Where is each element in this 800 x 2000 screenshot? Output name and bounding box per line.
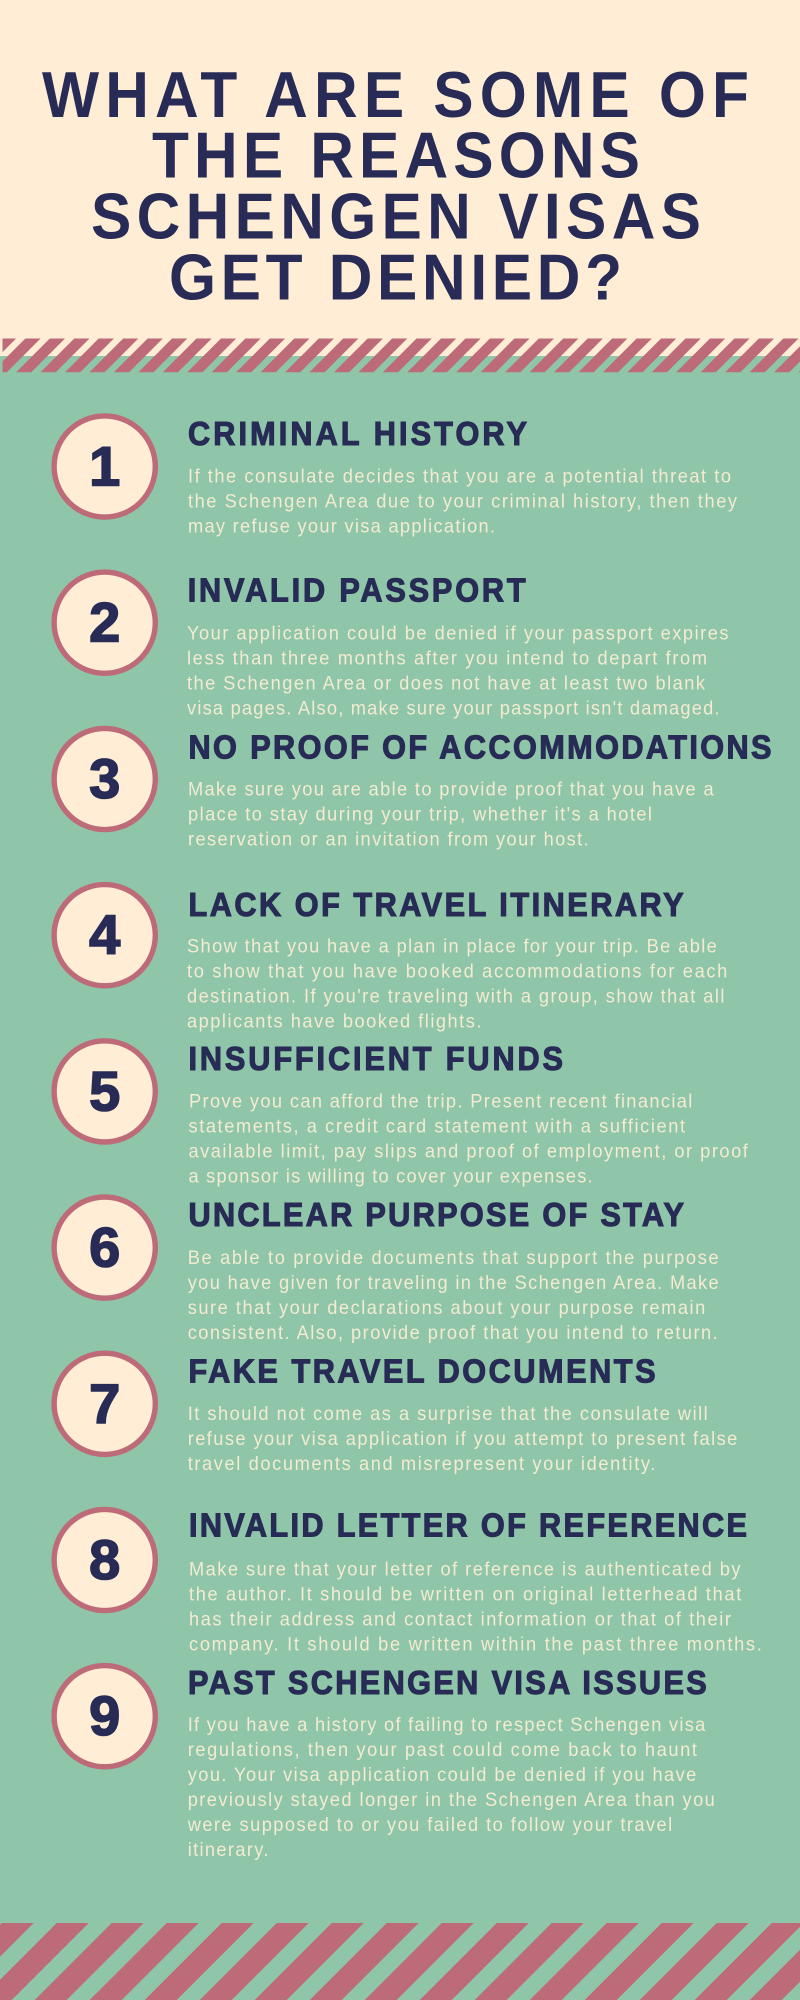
text 6: sure that your declarations about your purpose remain bbox=[188, 1297, 705, 1318]
number badge 7: 7 bbox=[89, 1372, 120, 1435]
heading 8: INVALID LETTER OF REFERENCE bbox=[189, 1507, 747, 1544]
text 8: company. It should be written within the past three months. bbox=[189, 1633, 762, 1654]
text 9: regulations, then your past could come back to haunt bbox=[188, 1739, 698, 1760]
heading 6: UNCLEAR PURPOSE OF STAY bbox=[188, 1196, 684, 1233]
text 2: Your application could be denied if your passport expires bbox=[187, 622, 729, 643]
number badge 9: 9 bbox=[89, 1684, 120, 1747]
text 8: has their address and contact information or that of their bbox=[189, 1608, 731, 1629]
number badge 2: 2 bbox=[89, 591, 120, 654]
number badge 2 bbox=[54, 572, 155, 673]
heading 1: CRIMINAL HISTORY bbox=[188, 415, 527, 452]
heading 9: PAST SCHENGEN VISA ISSUES bbox=[188, 1664, 707, 1701]
text 3: Make sure you are able to provide proof that you have a bbox=[188, 778, 714, 800]
number badge 8 bbox=[54, 1509, 155, 1611]
item 9: past schengen visa issues bbox=[54, 1664, 715, 1860]
heading 2: INVALID PASSPORT bbox=[188, 572, 526, 609]
number badge 3 bbox=[54, 728, 155, 830]
text 7: travel documents and misrepresent your identity. bbox=[188, 1453, 655, 1474]
text 4: to show that you have booked accommodations for each bbox=[187, 960, 727, 981]
item 7: fake travel documents bbox=[54, 1353, 737, 1474]
item 2: invalid passport bbox=[54, 572, 729, 718]
heading 3: NO PROOF OF ACCOMMODATIONS bbox=[188, 728, 772, 766]
heading 7: FAKE TRAVEL DOCUMENTS bbox=[188, 1353, 656, 1390]
number badge 4: 4 bbox=[89, 903, 120, 966]
text 2 bbox=[187, 622, 729, 718]
text 4: applicants have booked flights. bbox=[187, 1010, 481, 1031]
text 1 bbox=[188, 465, 738, 536]
title bbox=[42, 59, 749, 314]
text 8 bbox=[189, 1558, 762, 1654]
text 7 bbox=[188, 1403, 737, 1474]
text 6 bbox=[188, 1247, 719, 1343]
text 1: the Schengen Area due to your criminal history, then they bbox=[188, 490, 738, 511]
heading 4: LACK OF TRAVEL ITINERARY bbox=[188, 886, 684, 923]
text 1: may refuse your visa application. bbox=[188, 515, 495, 536]
number badge 1 bbox=[54, 416, 155, 517]
text 1: If the consulate decides that you are a potential threat to bbox=[188, 465, 731, 486]
number badge 5 bbox=[54, 1041, 155, 1142]
number badge 3: 3 bbox=[89, 747, 120, 810]
text 6: consistent. Also, provide proof that you intend to return. bbox=[188, 1322, 718, 1343]
text 3 bbox=[188, 778, 714, 850]
header panel: cream bbox=[0, 0, 800, 356]
title: THE REASONS bbox=[152, 120, 640, 192]
text 9: If you have a history of failing to respect Schengen visa bbox=[188, 1714, 706, 1735]
text 3: place to stay during your trip, whether it's a hotel bbox=[188, 803, 652, 825]
text 9: you. Your visa application could be denied if you have bbox=[188, 1764, 696, 1785]
number badge 6: 6 bbox=[89, 1216, 120, 1279]
text 7: It should not come as a surprise that the consulate will bbox=[188, 1403, 708, 1424]
number badge 5: 5 bbox=[89, 1059, 120, 1122]
item 5: insufficient funds bbox=[54, 1040, 749, 1186]
text 4: destination. If you're traveling with a group, show that all bbox=[187, 985, 724, 1006]
item 4: lack of travel itinerary bbox=[54, 885, 727, 1031]
text 9 bbox=[187, 1714, 715, 1860]
text 3: reservation or an invitation from your host. bbox=[188, 828, 589, 850]
text 5: statements, a credit card statement with a sufficient bbox=[188, 1115, 686, 1136]
number badge 8: 8 bbox=[89, 1528, 120, 1591]
bottom striped band bbox=[0, 1923, 800, 2000]
text 5: available limit, pay slips and proof of employment, or proof bbox=[188, 1140, 749, 1161]
title: WHAT ARE SOME OF bbox=[42, 59, 749, 131]
number badge 7 bbox=[54, 1353, 155, 1454]
text 4 bbox=[187, 935, 727, 1031]
number badge 9 bbox=[54, 1666, 155, 1767]
title: SCHENGEN VISAS bbox=[91, 181, 701, 253]
text 4: Show that you have a plan in place for your trip. Be able bbox=[187, 935, 717, 956]
text 5: a sponsor is willing to cover your expenses. bbox=[188, 1165, 593, 1186]
text 9: itinerary. bbox=[188, 1839, 268, 1860]
title: GET DENIED? bbox=[169, 242, 622, 314]
text 9: previously stayed longer in the Schengen Area than you bbox=[188, 1789, 715, 1810]
item 3: no proof of accommodations bbox=[54, 728, 772, 850]
text 8: the author. It should be written on original letterhead that bbox=[189, 1583, 742, 1604]
item 8: invalid letter of reference bbox=[54, 1507, 762, 1654]
item 1: criminal history bbox=[54, 415, 738, 536]
text 2: visa pages. Also, make sure your passport isn't damaged. bbox=[187, 697, 720, 718]
text 9: were supposed to or you failed to follow your travel bbox=[187, 1814, 672, 1835]
text 5: Prove you can afford the trip. Present recent financial bbox=[189, 1090, 692, 1111]
text 6: you have given for traveling in the Schengen Area. Make bbox=[188, 1272, 719, 1293]
top striped band bbox=[0, 338, 800, 372]
text 5 bbox=[188, 1090, 749, 1186]
number badge 4 bbox=[54, 885, 155, 986]
item 6: unclear purpose of stay bbox=[54, 1196, 719, 1343]
text 7: refuse your visa application if you attempt to present false bbox=[188, 1428, 737, 1449]
number badge 6 bbox=[54, 1197, 155, 1298]
text 2: the Schengen Area or does not have at least two blank bbox=[187, 672, 706, 693]
heading 5: INSUFFICIENT FUNDS bbox=[188, 1040, 563, 1077]
text 6: Be able to provide documents that support the purpose bbox=[188, 1247, 719, 1268]
number badge 1: 1 bbox=[89, 434, 120, 498]
text 8: Make sure that your letter of reference is authenticated by bbox=[189, 1558, 741, 1579]
text 2: less than three months after you intend to depart from bbox=[187, 647, 707, 668]
